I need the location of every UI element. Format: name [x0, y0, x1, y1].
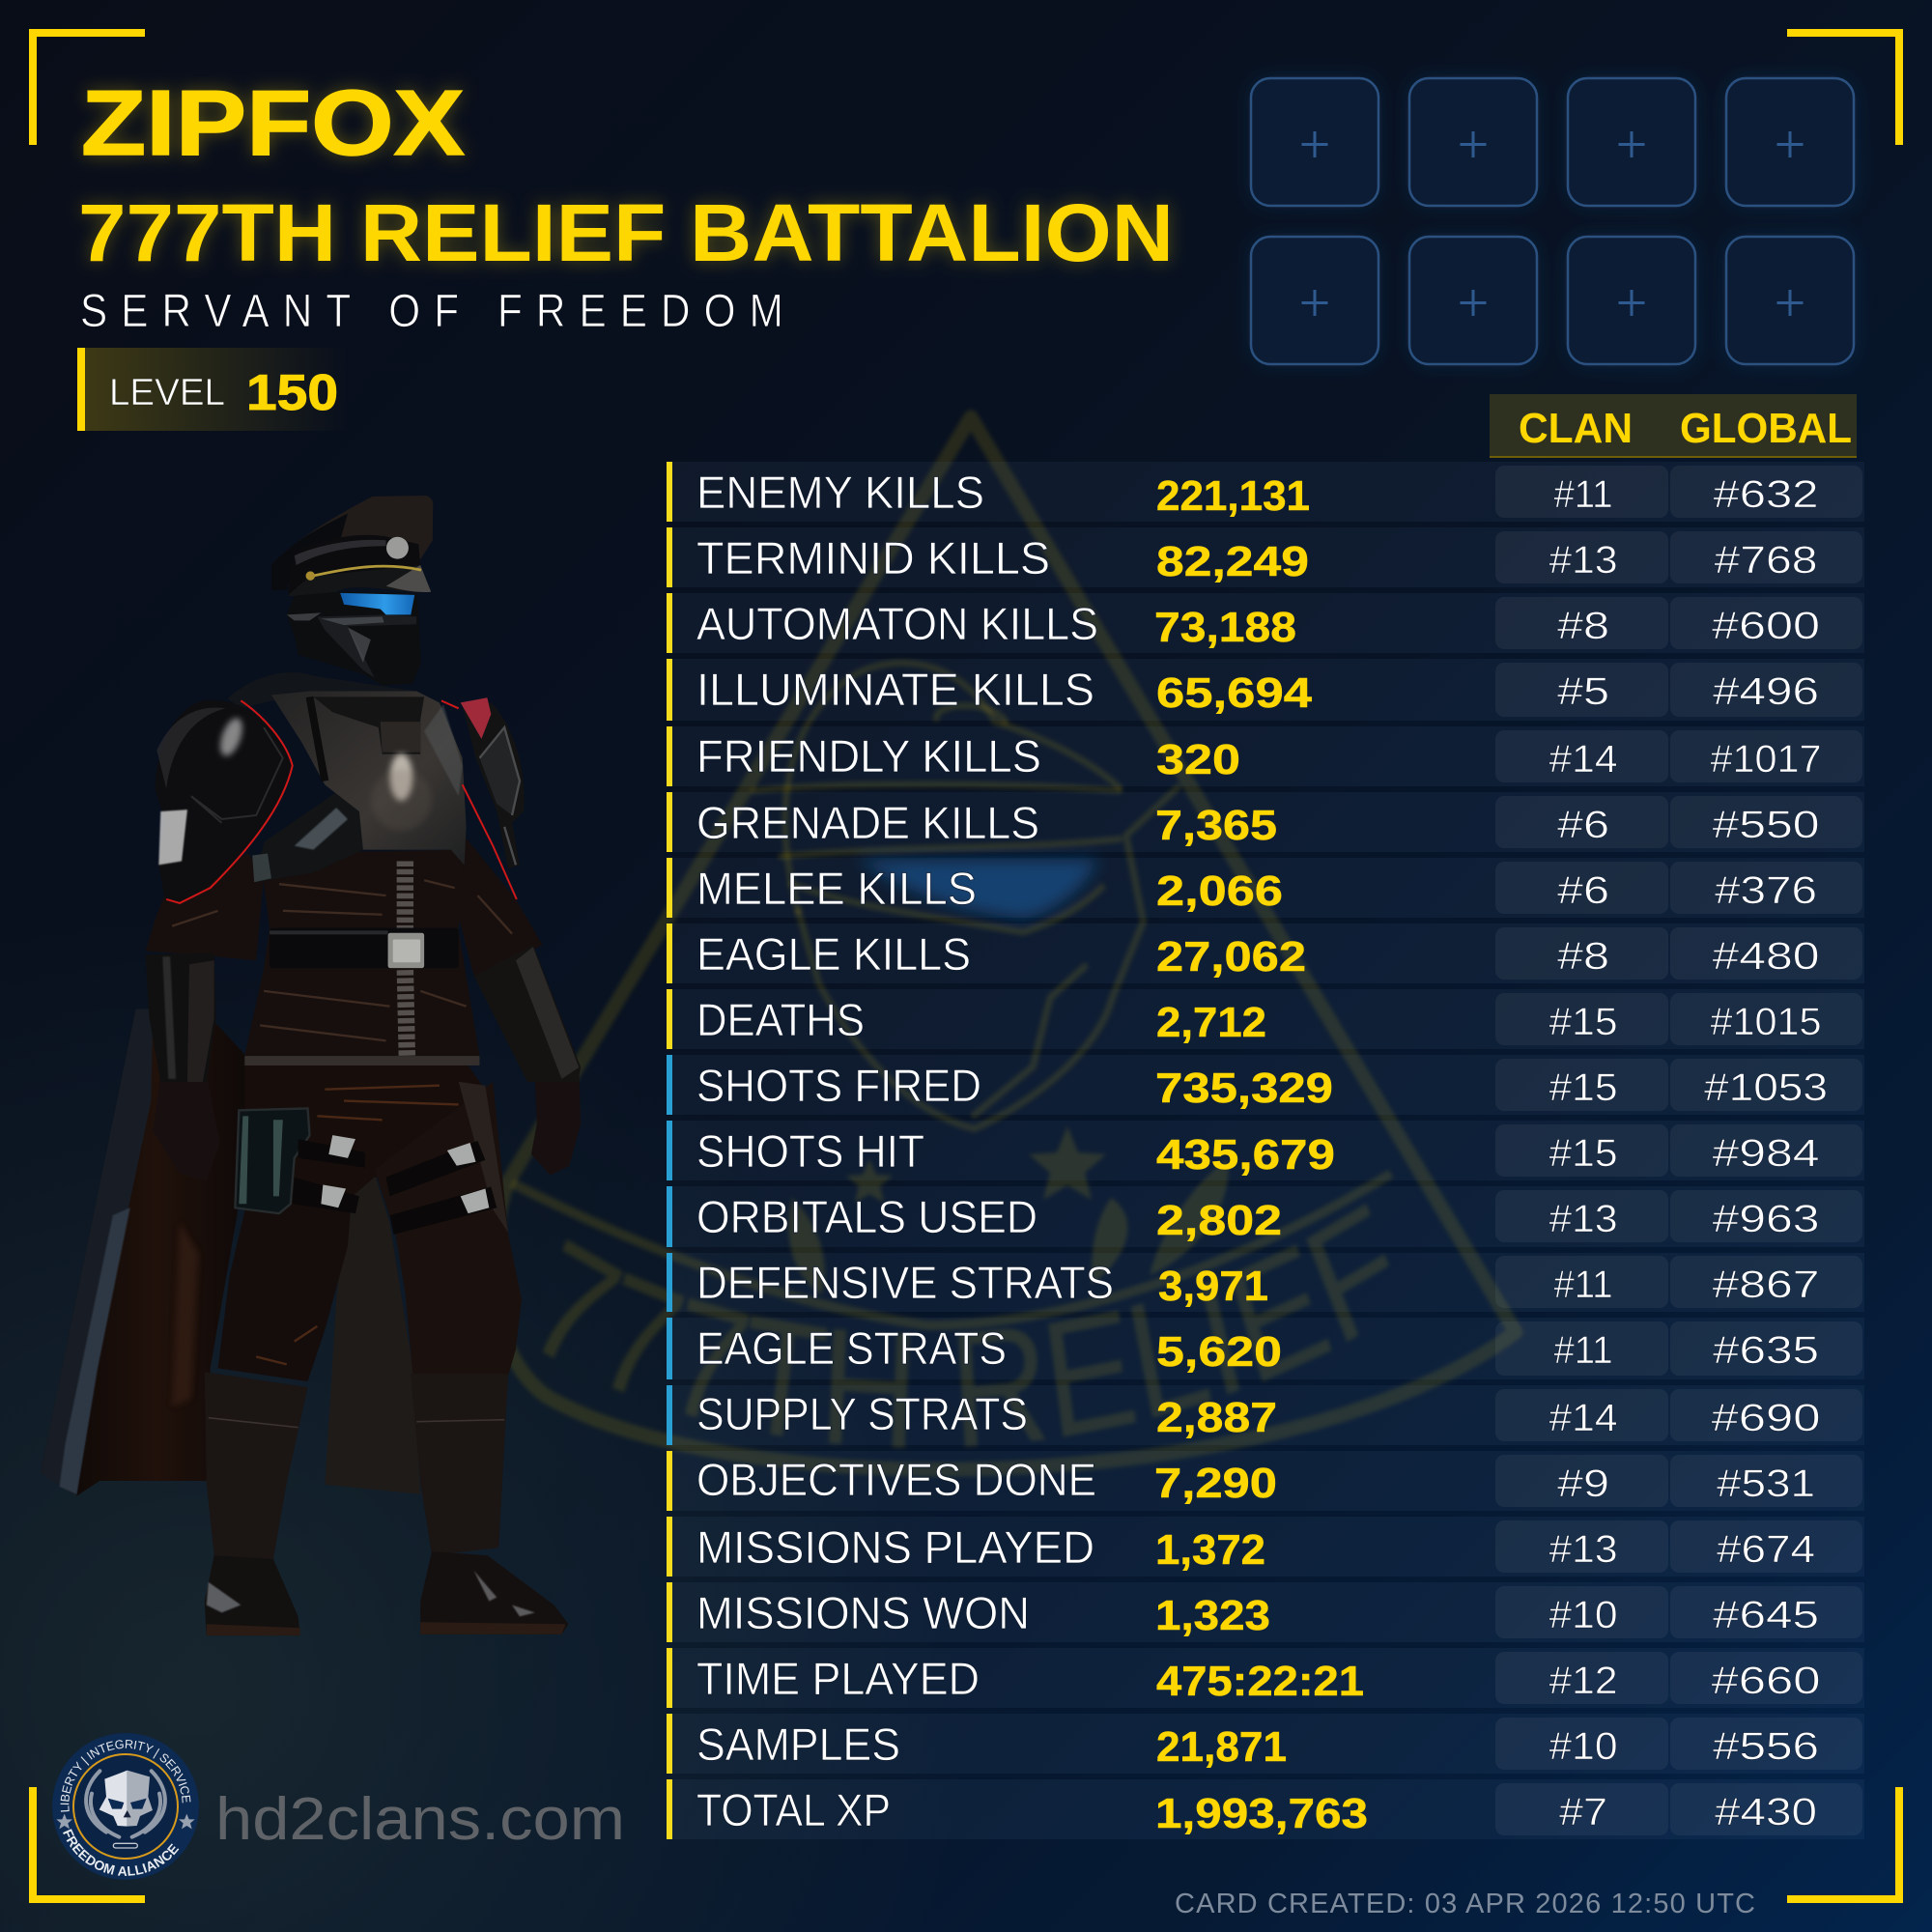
row: grenade kills [667, 792, 1864, 852]
row: eagle strats: EAGLE STRATS [696, 1322, 1007, 1374]
row: terminid kills [667, 527, 1864, 587]
row: automaton kills: #8 [1557, 605, 1609, 647]
medal slot 3 [1568, 78, 1695, 206]
row: melee kills: #376 [1715, 869, 1817, 912]
row: friendly kills [667, 726, 1864, 786]
row: illuminate kills [667, 659, 1864, 721]
row: time played [667, 1648, 1864, 1708]
row: objectives done: #531 [1717, 1463, 1815, 1505]
row: defensive strats: #867 [1712, 1264, 1820, 1306]
row: terminid kills: #13 [1549, 539, 1617, 582]
row: time played: #660 [1712, 1660, 1820, 1702]
row: shots fired: SHOTS FIRED [696, 1060, 981, 1111]
badge: top motto: LIBERTY | INTEGRITY | SERVICE [60, 1740, 191, 1812]
corner bracket: top right [1787, 29, 1903, 145]
row: friendly kills: FRIENDLY KILLS [696, 730, 1041, 781]
row: automaton kills: AUTOMATON KILLS [696, 598, 1098, 649]
row: automaton kills: #600 [1712, 605, 1820, 647]
row: deaths: 2,712 [1156, 999, 1266, 1046]
row: supply strats [667, 1385, 1864, 1445]
row: defensive strats: #11 [1553, 1264, 1613, 1306]
medal slot 2 [1409, 78, 1537, 206]
row: enemy kills: #632 [1714, 473, 1818, 516]
row: supply strats: #14 [1549, 1397, 1617, 1439]
level label: LEVEL [109, 372, 225, 413]
row: supply strats: SUPPLY STRATS [696, 1388, 1028, 1439]
row: orbitals used: ORBITALS USED [696, 1191, 1037, 1242]
row: supply strats: 2,887 [1156, 1394, 1277, 1441]
row: enemy kills: 221,131 [1156, 472, 1310, 520]
row: shots fired: #15 [1549, 1066, 1617, 1109]
row: eagle kills [667, 923, 1864, 983]
badge: skull [99, 1771, 153, 1827]
card creation timestamp: CARD CREATED: 03 APR 2026 12:50 UTC [1175, 1889, 1755, 1919]
row: enemy kills: ENEMY KILLS [696, 467, 984, 518]
row: enemy kills: #11 [1553, 473, 1613, 516]
subtitle: rank title: SERVANT OF FREEDOM [80, 284, 783, 337]
row: samples: SAMPLES [696, 1719, 900, 1770]
row: grenade kills: #550 [1712, 804, 1820, 846]
row: grenade kills: GRENADE KILLS [696, 797, 1039, 848]
row: total xp: #430 [1715, 1791, 1817, 1833]
soldier: lower body [41, 1009, 581, 1635]
row: missions won: #10 [1549, 1594, 1617, 1636]
row: supply strats: #690 [1712, 1397, 1820, 1439]
row: eagle strats: 5,620 [1156, 1328, 1282, 1376]
table header: clan and global [1490, 394, 1857, 458]
row: eagle strats: #11 [1553, 1329, 1613, 1372]
row: missions played: #674 [1717, 1528, 1815, 1571]
row: total xp: #7 [1559, 1791, 1607, 1833]
row: objectives done: 7,290 [1154, 1460, 1277, 1507]
row: shots hit [667, 1121, 1864, 1180]
row: terminid kills: TERMINID KILLS [696, 532, 1050, 583]
row: missions won: #645 [1713, 1594, 1819, 1636]
row: grenade kills: #6 [1557, 804, 1609, 846]
row: enemy kills [667, 462, 1864, 522]
row: samples: #556 [1713, 1725, 1819, 1768]
row: melee kills [667, 858, 1864, 918]
medal slot 8 [1726, 237, 1854, 364]
website name: hd2clans.com [215, 1786, 625, 1853]
row: samples: 21,871 [1156, 1723, 1287, 1771]
row: shots hit: #15 [1549, 1132, 1617, 1175]
row: illuminate kills: #5 [1557, 670, 1609, 713]
row: illuminate kills: #496 [1713, 670, 1819, 713]
row: missions played [667, 1517, 1864, 1577]
row: melee kills: 2,066 [1156, 867, 1283, 915]
row: samples: #10 [1549, 1725, 1617, 1768]
row: deaths: DEATHS [696, 994, 865, 1045]
row: eagle kills: EAGLE KILLS [696, 928, 971, 980]
row: eagle kills: 27,062 [1156, 933, 1306, 980]
row: illuminate kills: 65,694 [1156, 669, 1313, 717]
row: orbitals used: 2,802 [1156, 1197, 1282, 1244]
row: friendly kills: #14 [1549, 738, 1617, 781]
stats table [667, 462, 1864, 1839]
row: deaths: #15 [1549, 1001, 1617, 1043]
row: melee kills: MELEE KILLS [696, 863, 977, 914]
row: grenade kills: 7,365 [1155, 802, 1277, 849]
row: time played: TIME PLAYED [696, 1653, 980, 1704]
row: melee kills: #6 [1557, 869, 1609, 912]
table header: clan and global: CLAN [1519, 405, 1633, 452]
medal slot 6 [1409, 237, 1537, 364]
row: missions played: #13 [1549, 1528, 1617, 1571]
soldier: torso and arms [145, 496, 581, 1082]
medal slot 1 [1251, 78, 1378, 206]
medal slots grid [1251, 78, 1854, 364]
row: total xp: 1,993,763 [1155, 1790, 1368, 1837]
row: automaton kills [667, 593, 1864, 653]
medal slot 5 [1251, 237, 1378, 364]
row: samples [667, 1714, 1864, 1774]
medal slot 7 [1568, 237, 1695, 364]
row: shots hit: SHOTS HIT [696, 1125, 924, 1177]
row: missions won: MISSIONS WON [696, 1587, 1030, 1638]
table header: clan and global: GLOBAL [1680, 405, 1852, 452]
row: total xp: TOTAL XP [696, 1784, 891, 1835]
corner bracket: bottom left [29, 1787, 145, 1903]
row: objectives done: OBJECTIVES DONE [696, 1454, 1096, 1505]
row: time played: 475:22:21 [1156, 1658, 1364, 1705]
row: friendly kills: #1017 [1710, 738, 1822, 781]
row: objectives done [667, 1451, 1864, 1511]
level badge [77, 348, 348, 431]
badge: stars [56, 1814, 195, 1829]
logo: freedom alliance badge [52, 1733, 199, 1880]
soldier: helmet and cap [271, 496, 433, 686]
row: defensive strats [667, 1253, 1864, 1312]
row: terminid kills: #768 [1714, 539, 1818, 582]
row: orbitals used: #963 [1712, 1198, 1820, 1240]
row: eagle strats: #635 [1713, 1329, 1819, 1372]
row: orbitals used [667, 1186, 1864, 1247]
watermark emblem: 777th relief triangle [502, 410, 1523, 1478]
corner bracket: bottom right [1787, 1787, 1903, 1903]
badge: bottom name: FREEDOM ALLIANCE [63, 1829, 180, 1876]
corner bracket: top left [29, 29, 145, 145]
row: illuminate kills: ILLUMINATE KILLS [696, 664, 1094, 715]
soldier figure [41, 496, 581, 1635]
row: deaths: #1015 [1710, 1001, 1822, 1043]
row: deaths [667, 989, 1864, 1049]
row: shots hit: #984 [1712, 1132, 1820, 1175]
row: defensive strats: DEFENSIVE STRATS [696, 1257, 1114, 1308]
row: missions won [667, 1582, 1864, 1642]
watermark: hooded head [753, 663, 1178, 1129]
row: missions played: 1,372 [1155, 1526, 1265, 1574]
row: terminid kills: 82,249 [1156, 538, 1309, 585]
row: shots hit: 435,679 [1156, 1131, 1335, 1179]
watermark: stars and laurels [788, 1126, 1229, 1294]
row: orbitals used: #13 [1549, 1198, 1617, 1240]
row: automaton kills: 73,188 [1154, 604, 1296, 651]
row: eagle strats [667, 1318, 1864, 1379]
row: shots fired: 735,329 [1155, 1065, 1333, 1112]
heading: clan name: 777TH RELIEF BATTALION [78, 187, 1174, 278]
row: eagle kills: #8 [1557, 935, 1609, 978]
watermark lettering: 777TH RELIEF [543, 1204, 1389, 1449]
row: defensive strats: 3,971 [1158, 1263, 1268, 1310]
level value: 150 [246, 365, 338, 421]
row: shots fired [667, 1055, 1864, 1115]
row: eagle kills: #480 [1712, 935, 1820, 978]
row: objectives done: #9 [1557, 1463, 1609, 1505]
row: time played: #12 [1549, 1660, 1617, 1702]
title: player name: ZIPFOX [81, 71, 465, 175]
row: shots fired: #1053 [1704, 1066, 1828, 1109]
row: missions won: 1,323 [1155, 1592, 1270, 1639]
row: friendly kills: 320 [1156, 736, 1240, 783]
row: total xp [667, 1779, 1864, 1839]
medal slot 4 [1726, 78, 1854, 206]
row: missions played: MISSIONS PLAYED [696, 1521, 1094, 1573]
